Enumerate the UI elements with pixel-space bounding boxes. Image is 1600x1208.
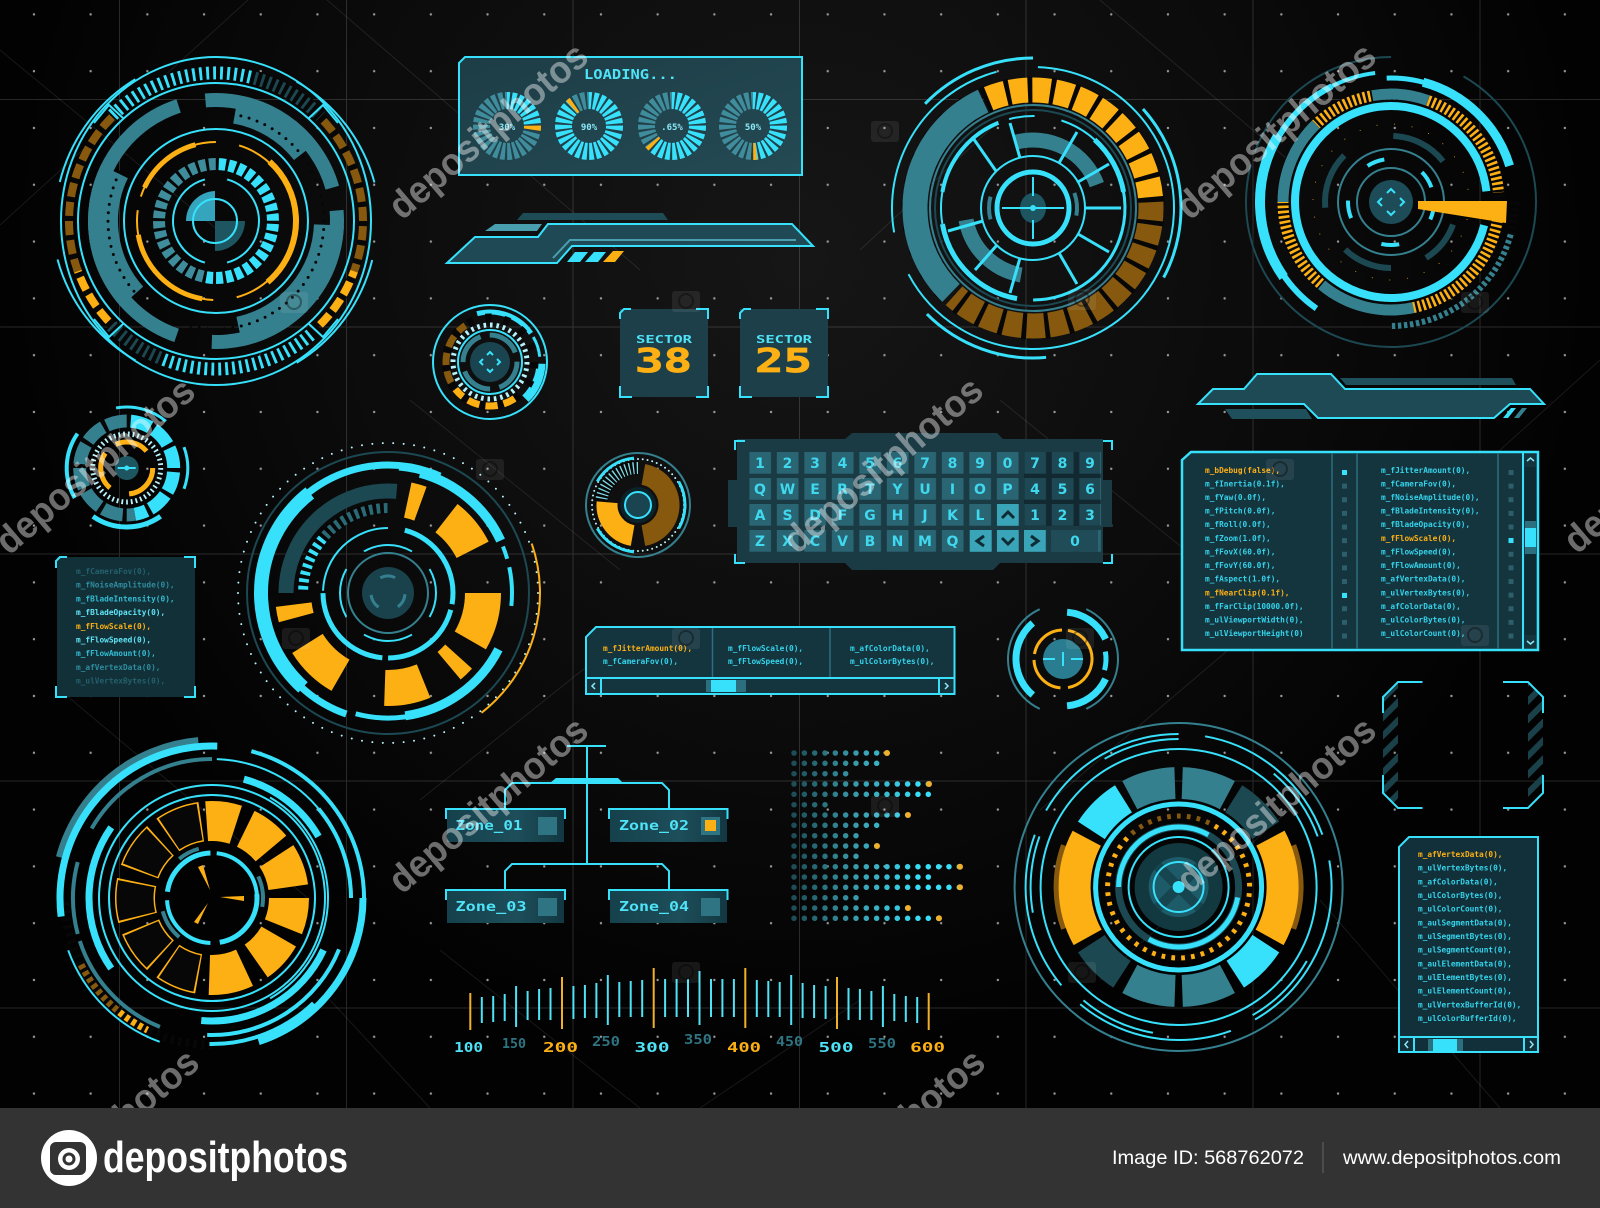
dot matrix chart <box>794 750 963 921</box>
zone 03: Zone_03 <box>456 900 526 915</box>
code column two: m_fJitterAmount(0), <box>1381 466 1470 475</box>
key labels: 0 <box>1070 534 1080 550</box>
progress ring 50% <box>723 96 783 156</box>
key labels: ZXCVBNMQ <box>755 534 959 550</box>
progress ring 30%: 30% <box>499 123 516 133</box>
zone 03 <box>446 890 565 923</box>
ruler labels: 100 <box>454 1041 483 1056</box>
logo icon <box>41 1130 97 1186</box>
code list panel bottom right: m_ulSegmentBytes(0), <box>1418 932 1512 941</box>
gauge: small crosshair dial <box>990 586 1136 732</box>
code list panel bottom right: m_ulColorBufferId(0), <box>1418 1014 1517 1023</box>
watermark text: depositphotos <box>381 35 596 228</box>
code list panel bottom right: m_afColorData(0), <box>1418 877 1498 886</box>
key grid <box>749 452 1106 552</box>
loading title: LOADING... <box>584 68 677 83</box>
data panel left <box>56 557 195 697</box>
zone 02 <box>609 809 728 842</box>
tick fan <box>594 461 638 504</box>
code list panel bottom right: m_afVertexData(0), <box>1418 850 1502 859</box>
data panel left: m_fFlowAmount(0), <box>76 649 156 658</box>
data panel left: m_fCameraFov(0), <box>76 567 151 576</box>
gauge: needle dial <box>1245 56 1537 348</box>
code column two: m_ulVertexBytes(0), <box>1381 588 1470 597</box>
small ticks lower right <box>1391 234 1514 329</box>
code column one: m_fAspect(1.0f), <box>1205 575 1280 584</box>
orange sectors <box>254 459 522 727</box>
watermark camera marks <box>280 121 1489 983</box>
code column one: m_fZoom(1.0f), <box>1205 534 1271 543</box>
zone 01 <box>446 809 565 842</box>
data panel left: m_fBladeIntensity(0), <box>76 594 175 603</box>
code column two: m_ulColorCount(0), <box>1381 629 1466 638</box>
code column one: m_fFovY(60.0f), <box>1205 561 1275 570</box>
data panel left: m_fFlowScale(0), <box>76 622 151 631</box>
key labels: 1234567890789 <box>755 456 1095 472</box>
code column one <box>1205 466 1304 638</box>
darker right keypad columns <box>1024 452 1100 526</box>
zone 04 <box>609 890 728 923</box>
code column one: m_fFovX(60.0f), <box>1205 548 1275 556</box>
scrollbar <box>1399 1037 1538 1052</box>
gauge needles <box>198 865 210 890</box>
gauge: large segmented dial top left <box>56 56 376 386</box>
loading panel <box>459 57 802 175</box>
code column two: m_afVertexData(0), <box>1381 575 1466 584</box>
key labels <box>754 456 1095 550</box>
code list panel bottom right: m_aulSegmentData(0), <box>1418 918 1512 927</box>
status markers <box>1344 470 1511 640</box>
code column two: m_fBladeIntensity(0), <box>1381 507 1480 516</box>
arrow glyphs <box>977 512 1038 546</box>
gauge: large orange wheel bottom left <box>56 737 366 1046</box>
code list panel top right <box>1182 452 1538 650</box>
code column one: m_fRoll(0.0f), <box>1205 520 1271 529</box>
data panel left: m_fBladeOpacity(0), <box>76 608 165 617</box>
data panel left: m_afVertexData(0), <box>76 663 160 672</box>
ruler scale <box>454 968 945 1056</box>
ruler labels: 300 <box>634 1041 670 1056</box>
zone 04: Zone_04 <box>619 900 689 915</box>
code list panel bottom right: m_aulElementData(0), <box>1418 959 1512 968</box>
code panel bottom centre: m_fJitterAmount(0), <box>603 644 692 653</box>
angled HUD bar right <box>1198 374 1544 419</box>
footer bar <box>0 1108 1600 1208</box>
code column two: m_ulColorBytes(0), <box>1381 616 1466 625</box>
code column two: m_fFlowSpeed(0), <box>1381 548 1456 556</box>
sector 38 panel: SECTOR <box>636 333 693 346</box>
code column two <box>1381 466 1480 638</box>
key labels: ASDFGHJKL <box>755 508 985 524</box>
ruler labels: 350 <box>684 1033 712 1048</box>
keyboard panel <box>728 433 1112 570</box>
code panel bottom centre <box>586 627 954 694</box>
gauge: large dial bottom right <box>1015 723 1343 1051</box>
code column one: m_ulViewportHeight(0) <box>1205 629 1304 638</box>
code column two: m_fCameraFov(0), <box>1381 479 1456 488</box>
watermark text: depositphotos <box>381 709 596 902</box>
sector 25 panel: SECTOR <box>756 333 813 346</box>
image id: Image ID: 568762072 <box>1112 1148 1304 1169</box>
gauge: donut with ticks <box>585 452 691 558</box>
code list panel bottom right: m_ulVertexBufferId(0), <box>1418 1000 1521 1009</box>
angled HUD bar <box>447 213 813 263</box>
orange outlined blocks <box>103 789 321 1007</box>
code column two: m_fNoiseAmplitude(0), <box>1381 493 1480 502</box>
code column two: m_fFlowScale(0), <box>1381 534 1456 543</box>
code column two: m_fBladeOpacity(0), <box>1381 520 1470 529</box>
ruler labels: 600 <box>910 1041 945 1056</box>
progress ring 30% <box>477 96 537 156</box>
zone 01: Zone_01 <box>456 819 523 834</box>
code list panel bottom right: m_ulColorCount(0), <box>1418 905 1502 914</box>
watermark text: depositphotos <box>776 369 991 562</box>
hatched bracket frame <box>1383 682 1543 808</box>
data panel left: m_fNoiseAmplitude(0), <box>76 581 175 590</box>
ruler labels <box>454 1033 945 1056</box>
data panel left: m_fFlowSpeed(0), <box>76 636 151 644</box>
zone tree diagram <box>446 746 728 923</box>
website: www.depositphotos.com <box>1342 1148 1561 1169</box>
key labels: 123 <box>1030 508 1095 524</box>
code column two: m_fFlowAmount(0), <box>1381 561 1461 570</box>
gauge: orange block dial <box>821 0 1245 420</box>
ruler labels: 200 <box>543 1041 578 1056</box>
watermark text: depositphotos <box>1169 709 1384 902</box>
code list panel bottom right: m_ulSegmentCount(0), <box>1418 946 1512 955</box>
ruler labels: 550 <box>868 1037 896 1052</box>
code column one: m_ulViewportWidth(0), <box>1205 616 1304 625</box>
highlighted arrow keys <box>970 504 1046 552</box>
code panel bottom centre: m_ulColorBytes(0), <box>850 657 934 666</box>
progress ring 50%: 50% <box>745 123 762 133</box>
sector 38 panel <box>620 309 708 397</box>
ruler labels: 400 <box>727 1041 761 1056</box>
sector 25 panel: 25 <box>755 341 812 380</box>
gauge: small dial left <box>45 386 209 550</box>
ticked corner arc <box>67 950 160 1043</box>
key labels: QWERTYUIOP456 <box>754 482 1095 498</box>
data panel left: m_ulVertexBytes(0), <box>76 677 165 686</box>
zone 02: Zone_02 <box>619 819 689 834</box>
ruler labels: 250 <box>592 1035 620 1050</box>
sector 38 panel: 38 <box>635 341 692 380</box>
scrollbar <box>1525 458 1536 644</box>
code column one: m_bDebug(false), <box>1205 466 1280 475</box>
code column one: m_fInertia(0.1f), <box>1205 479 1285 488</box>
code list panel bottom right: m_ulElementCount(0), <box>1418 987 1512 996</box>
progress ring 65% <box>636 90 708 162</box>
code panel bottom centre: m_afColorData(0), <box>850 644 930 653</box>
ruler labels: 150 <box>502 1037 526 1052</box>
code panel bottom centre: m_fFlowSpeed(0), <box>728 657 803 666</box>
code list panel bottom right: m_ulVertexBytes(0), <box>1418 864 1507 873</box>
progress ring 65%: .65% <box>661 123 683 133</box>
gauge: centre left orange block dial <box>237 442 541 744</box>
needle <box>1418 201 1507 223</box>
code list panel bottom right <box>1399 837 1538 1052</box>
code panel bottom centre: m_fFlowScale(0), <box>728 644 803 653</box>
code column one: m_fNearClip(0.1f), <box>1205 588 1290 597</box>
orange filled blocks <box>105 791 319 1005</box>
code panel bottom centre: m_fCameraFov(0), <box>603 657 678 666</box>
gauge: small targeting dial <box>422 294 558 430</box>
progress ring 90% <box>553 90 625 162</box>
code list panel bottom right: m_ulColorBytes(0), <box>1418 891 1502 900</box>
code column one: m_fPitch(0.0f), <box>1205 507 1275 516</box>
sector 25 panel <box>740 309 828 397</box>
ruler labels: 500 <box>818 1041 854 1056</box>
watermark text: depositphotos <box>1169 35 1384 228</box>
progress ring 90%: 90% <box>581 123 598 133</box>
logo wordmark: depositphotos <box>103 1133 348 1182</box>
tick arc <box>298 503 388 590</box>
code list panel bottom right: m_ulElementBytes(0), <box>1418 973 1512 982</box>
ruler labels: 450 <box>776 1035 803 1050</box>
code column two: m_afColorData(0), <box>1381 602 1461 611</box>
code column one: m_fFarClip(10000.0f), <box>1205 602 1304 611</box>
code column one: m_fYaw(0.0f), <box>1205 493 1266 502</box>
